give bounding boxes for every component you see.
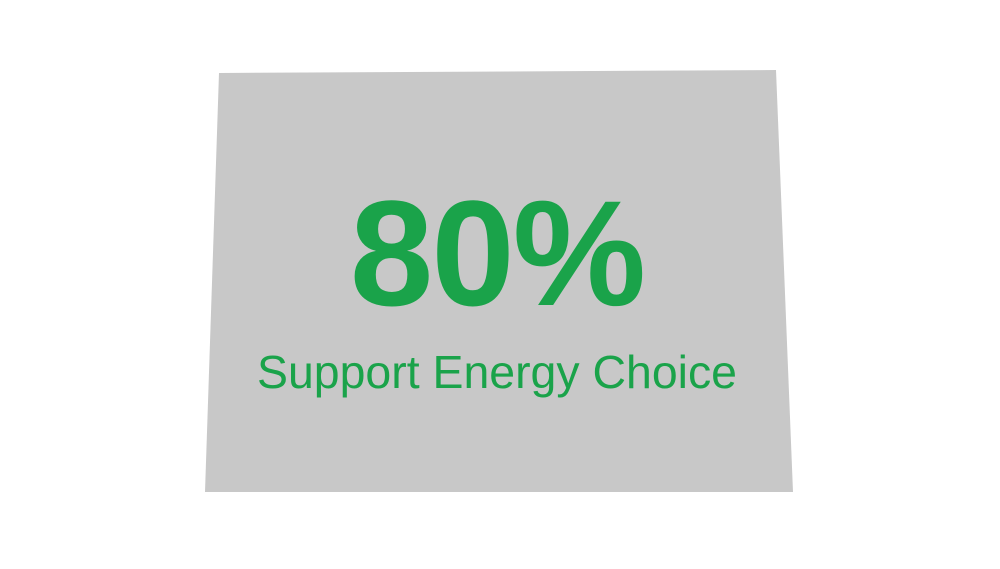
caption: Support Energy Choice: Support Energy Choice [257,346,737,398]
map: colorado shape [205,70,793,492]
headline stat: 80%: 80% [350,169,644,337]
